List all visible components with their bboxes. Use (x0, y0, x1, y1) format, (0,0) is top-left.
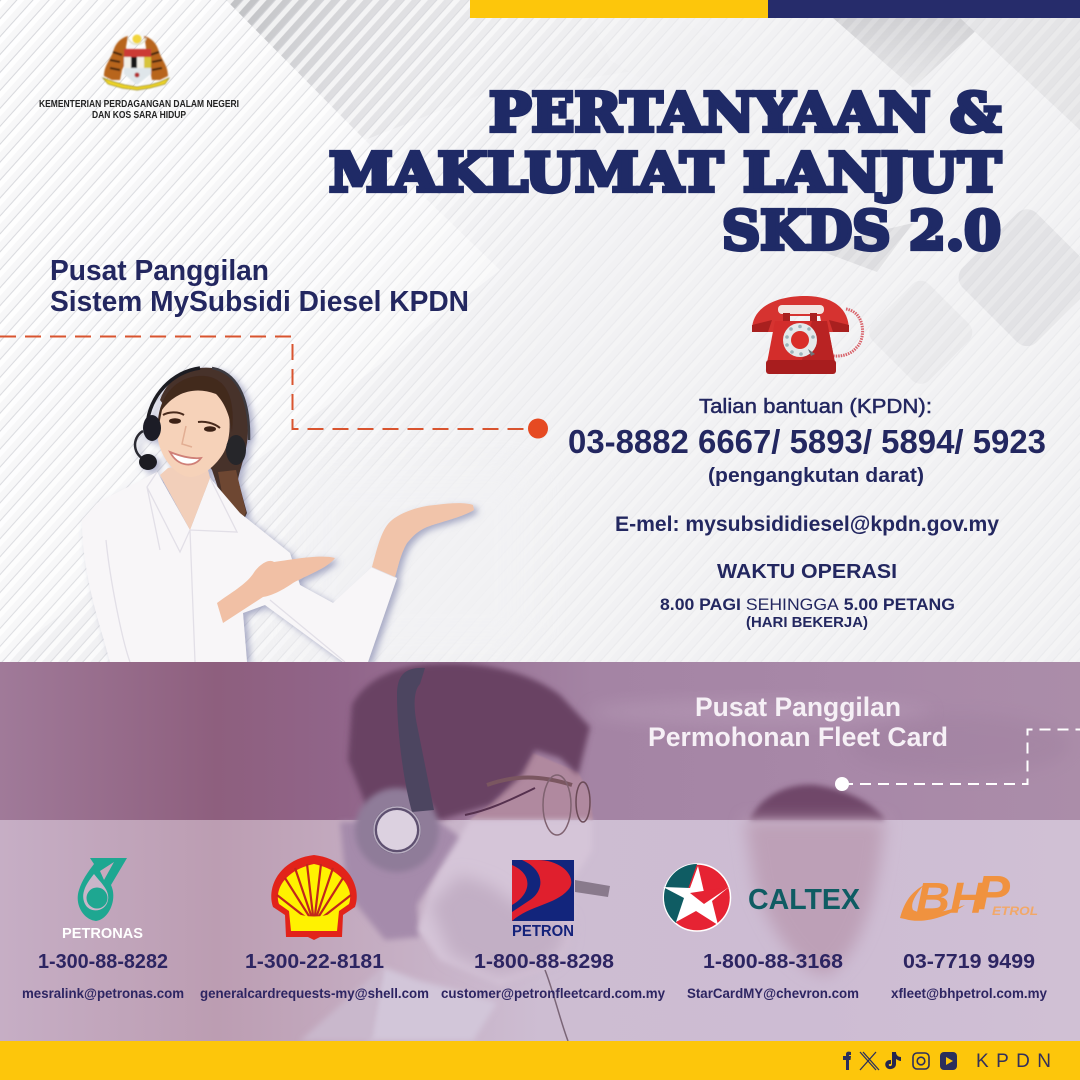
icon: red telephone (752, 296, 863, 374)
crest: Malaysian coat of arms (103, 34, 169, 90)
helpline details: (pengangkutan darat) (708, 464, 924, 487)
phone numbers: 1-300-88-8282 (38, 950, 168, 973)
photo: foreground agent with headset (300, 663, 610, 1041)
ponytail and hair (160, 368, 248, 532)
collar (367, 967, 497, 1041)
ministry name: KEMENTERIAN PERDAGANGAN DALAM NEGERI (39, 99, 239, 110)
orange dashed connector (0, 336, 548, 438)
beard (430, 875, 568, 978)
phone numbers: 1-300-22-8181 (245, 950, 384, 973)
email addresses: mesralink@petronas.com (22, 985, 184, 1001)
helpline details: 03-8882 6667/ 5893/ 5894/ 5923 (568, 424, 1046, 461)
helpline details (568, 395, 1046, 631)
logo: Shell (271, 855, 357, 940)
title: MAKLUMAT LANJUT (329, 142, 1001, 204)
glasses (487, 778, 572, 785)
top bar: yellow (470, 0, 768, 18)
email addresses: generalcardrequests-my@shell.com (200, 985, 429, 1001)
title (329, 82, 1001, 262)
photo band: fleet card call centre (0, 662, 1080, 1041)
logo: Caltex: CALTEX (748, 884, 861, 916)
heading: Sistem MySubsidi call centre: Pusat Panggilan (50, 255, 269, 287)
logo: BHPetrol: ETROL (992, 904, 1038, 918)
phone numbers: 1-800-88-3168 (703, 950, 843, 973)
logo: BHPetrol (900, 867, 1038, 923)
email addresses (22, 985, 1047, 1001)
KPDN wordmark: KPDN (976, 1051, 1051, 1072)
logo: Petron (512, 860, 574, 940)
heading: fleet card call centre: Pusat Panggilan (695, 692, 901, 722)
background panel (0, 0, 1080, 662)
helpline details: E-mel: mysubsididiesel@kpdn.gov.my (615, 512, 999, 536)
neck (160, 462, 210, 530)
face (418, 820, 592, 985)
illustration: call centre agent (82, 368, 474, 662)
headset (147, 368, 200, 425)
footer bar (0, 1041, 1080, 1080)
title: PERTANYAAN & (489, 82, 1001, 144)
social icons (843, 1052, 957, 1070)
heading: fleet card call centre: Permohonan Fleet Card (648, 722, 948, 752)
phone numbers (38, 950, 1035, 973)
email addresses: xfleet@bhpetrol.com.my (891, 985, 1047, 1001)
white dashed connector (835, 730, 1080, 791)
helpline details: 8.00 PAGI SEHINGGA 5.00 PETANG (660, 595, 955, 614)
phone numbers: 03-7719 9499 (903, 950, 1035, 973)
microphone (575, 880, 610, 897)
phone numbers: 1-800-88-8298 (474, 950, 614, 973)
logo: Caltex (663, 864, 861, 931)
top bar: navy (768, 0, 1080, 18)
photo: background colleague (745, 785, 885, 975)
front hair (158, 376, 233, 432)
skin in the upper band (470, 753, 593, 820)
heading: Sistem MySubsidi call centre (50, 255, 469, 318)
face (158, 387, 230, 477)
lower hand (217, 557, 335, 623)
ministry name: DAN KOS SARA HIDUP (92, 110, 186, 121)
heading: fleet card call centre (648, 692, 948, 752)
email addresses: StarCardMY@chevron.com (687, 985, 859, 1001)
shirt body and sleeve (82, 472, 397, 662)
logo: Petronas (62, 858, 143, 942)
helpline details: Talian bantuan (KPDN): (699, 395, 932, 418)
hair (348, 663, 590, 820)
title: SKDS 2.0 (722, 200, 1001, 262)
helpline details: WAKTU OPERASI (717, 560, 897, 583)
lower hair behind ear (340, 822, 470, 940)
helpline details: (HARI BEKERJA) (746, 614, 868, 631)
headset ear cup (355, 788, 439, 872)
email addresses: customer@petronfleetcard.com.my (441, 985, 665, 1001)
logo: Petron: PETRON (512, 923, 574, 940)
ministry name (39, 99, 239, 121)
raised hand (372, 503, 474, 577)
logo: BHPetrol: BH (916, 874, 985, 923)
logo: BHPetrol: P (976, 867, 1011, 920)
logo: Petronas: PETRONAS (62, 926, 143, 942)
heading: Sistem MySubsidi call centre: Sistem MySubsidi Diesel KPDN (50, 286, 469, 318)
